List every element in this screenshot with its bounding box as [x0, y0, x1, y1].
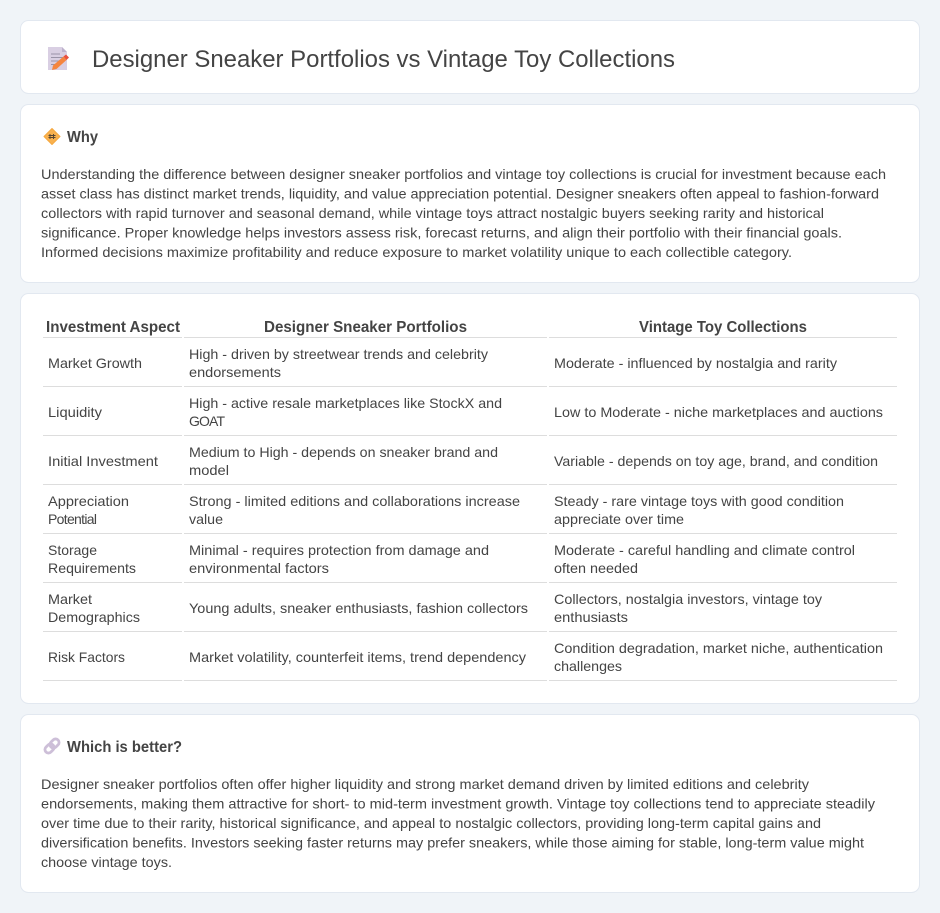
row: liquidity: GOAT — [189, 413, 225, 429]
row: risk factors: Market volatility, counterfeit items, trend dependency — [189, 649, 526, 665]
icon: document with pencil — [48, 47, 69, 70]
row: initial investment: Variable - depends on toy age, brand, and condition — [554, 453, 878, 469]
row: liquidity: High - active resale marketplaces like StockX and — [189, 395, 502, 411]
text block: why paragraph: collectors with rapid turnover and seasonal demand, while vintage toys attract nostalgic buyers seeking rarity and historical — [41, 205, 824, 221]
row: liquidity: Liquidity — [48, 404, 102, 420]
row: risk factors: challenges — [554, 658, 622, 674]
row: market demographics: Demographics — [48, 609, 140, 625]
row: market growth: Market Growth — [48, 355, 142, 371]
row: appreciation potential: Steady - rare vintage toys with good condition — [554, 493, 844, 509]
panel: why — [20, 104, 920, 282]
row: storage requirements: Requirements — [48, 560, 136, 576]
row: appreciation potential: Strong - limited editions and collaborations increase — [189, 493, 520, 509]
row: market growth: endorsements — [189, 364, 281, 380]
row: market growth: High - driven by streetwear trends and celebrity — [189, 346, 488, 362]
row: risk factors: Risk Factors — [48, 649, 125, 665]
row: market demographics: Collectors, nostalgia investors, vintage toy — [554, 591, 822, 607]
text block: why paragraph — [41, 166, 886, 260]
table header: Investment Aspect — [46, 319, 181, 336]
row: market demographics — [48, 591, 822, 625]
icon: orange diamond sign — [44, 128, 60, 144]
title: Designer Sneaker Portfolios vs Vintage Toy Collections — [92, 46, 675, 73]
table header — [46, 319, 807, 336]
row: market growth — [48, 346, 837, 380]
row: appreciation potential: value — [189, 511, 223, 527]
icon: chain link — [43, 737, 61, 755]
row: appreciation potential: appreciate over time — [554, 511, 684, 527]
row: storage requirements: Moderate - careful handling and climate control — [554, 542, 855, 558]
row: appreciation potential: Appreciation — [48, 493, 129, 509]
text block: which is better paragraph: diversification benefits. Investors seeking faster returns may prefer sneakers, while those aiming for stable, long-term value might — [41, 834, 864, 850]
text block: which is better paragraph: choose vintage toys. — [41, 854, 172, 870]
text block: why paragraph: Informed decisions maximize profitability and reduce exposure to market volatility unique to each collectible category. — [41, 244, 792, 260]
table header: Designer Sneaker Portfolios — [264, 319, 467, 336]
heading: why: Why — [67, 129, 98, 146]
row: storage requirements: often needed — [554, 560, 638, 576]
row: storage requirements: Storage — [48, 542, 97, 558]
row: initial investment: Medium to High - depends on sneaker brand and — [189, 444, 498, 460]
row: appreciation potential — [48, 493, 844, 527]
text block: which is better paragraph — [41, 776, 875, 870]
row: storage requirements — [48, 542, 855, 576]
text block: why paragraph: Understanding the difference between designer sneaker portfolios and vintage toy collections is crucial for investment because each — [41, 166, 886, 182]
panel: comparison table — [20, 294, 920, 704]
table header: Vintage Toy Collections — [639, 319, 807, 336]
text block: which is better paragraph: endorsements, making them attractive for short- to mid-term investment growth. Vintage toy collections tend to appreciate steadily — [41, 796, 875, 812]
row: storage requirements: environmental factors — [189, 560, 329, 576]
row: liquidity — [48, 395, 883, 429]
text block: which is better paragraph: Designer sneaker portfolios often offer higher liquidity and strong market demand driven by limited editions and celebrity — [41, 776, 809, 792]
row: market demographics: enthusiasts — [554, 609, 628, 625]
row: initial investment: model — [189, 462, 229, 478]
row: storage requirements: Minimal - requires protection from damage and — [189, 542, 489, 558]
text block: which is better paragraph: over time due to their rarity, historical significance, and appeal to nostalgic collectors, providing long-term capital gains and — [41, 815, 821, 831]
row: initial investment: Initial Investment — [48, 453, 158, 469]
row: market demographics: Young adults, sneaker enthusiasts, fashion collectors — [189, 600, 528, 616]
heading: which is better: Which is better? — [67, 739, 182, 756]
row: market demographics: Market — [48, 591, 92, 607]
text block: why paragraph: significance. Proper knowledge helps investors assess risk, forecast returns, and align their portfolio with their financial goals. — [41, 224, 842, 240]
row: appreciation potential: Potential — [48, 511, 97, 527]
panel: title header — [20, 20, 920, 94]
row: liquidity: Low to Moderate - niche marketplaces and auctions — [554, 404, 883, 420]
row: risk factors — [48, 640, 883, 674]
row: risk factors: Condition degradation, market niche, authentication — [554, 640, 883, 656]
text block: why paragraph: asset class has distinct market trends, liquidity, and value appreciation potential. Designer sneakers often appeal to fashion-forward — [41, 186, 879, 202]
row: market growth: Moderate - influenced by nostalgia and rarity — [554, 355, 837, 371]
panel: which is better — [20, 714, 920, 892]
row: initial investment — [48, 444, 878, 478]
